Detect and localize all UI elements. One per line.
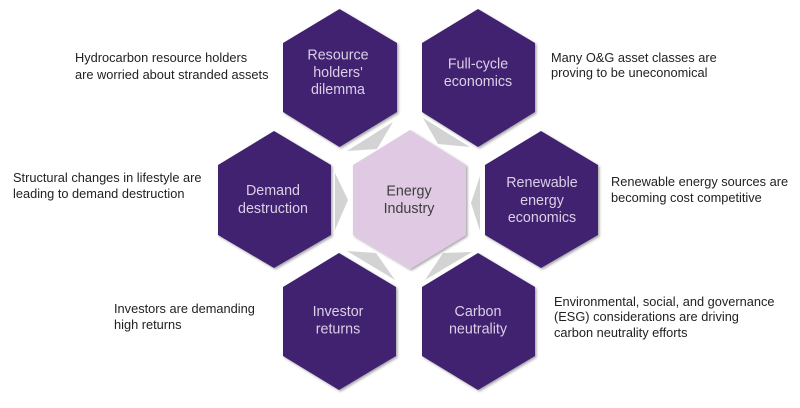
hexagon: carbon neutrality xyxy=(422,253,535,390)
hexagon: resource holders' dilemma: Resource xyxy=(307,48,369,64)
hexagon: energy industry center xyxy=(353,130,466,269)
text: investor description: Investors are demanding xyxy=(114,301,255,316)
arrow: resource holders to center xyxy=(347,122,393,151)
text: carbon description: Environmental, social, and governance xyxy=(554,294,775,309)
hexagon: renewable energy economics: Renewable xyxy=(506,175,578,191)
hexagon: demand destruction xyxy=(218,131,331,268)
arrow: investor to center xyxy=(347,251,395,280)
text: renewable description xyxy=(611,174,788,205)
hexagon: resource holders' dilemma: holders' xyxy=(313,65,363,81)
hexagon: demand destruction: destruction xyxy=(238,201,308,217)
hexagon: resource holders' dilemma: dilemma xyxy=(311,82,365,98)
hexagon: renewable energy economics: economics xyxy=(508,210,576,226)
hexagon: renewable energy economics xyxy=(485,131,598,268)
hexagon: demand destruction: Demand xyxy=(246,183,300,199)
hexagon: investor returns xyxy=(283,253,396,390)
hexagon: carbon neutrality: neutrality xyxy=(449,322,508,338)
text: resource holders description: are worried about stranded assets xyxy=(75,67,268,82)
arrow: carbon to center xyxy=(425,252,472,280)
text: investor description: high returns xyxy=(114,317,182,332)
hexagon: renewable energy economics: energy xyxy=(520,193,565,209)
text: demand description: leading to demand destruction xyxy=(13,186,184,201)
text: carbon description xyxy=(554,294,775,340)
text: renewable description: Renewable energy sources are xyxy=(611,174,788,189)
text: resource holders description xyxy=(75,50,268,82)
text: resource holders description: Hydrocarbon resource holders xyxy=(75,50,247,65)
hexagon: investor returns: Investor xyxy=(313,304,364,320)
arrow: full-cycle to center xyxy=(423,118,470,147)
hexagon: full-cycle economics: Full-cycle xyxy=(448,56,508,72)
hexagon: carbon neutrality: Carbon xyxy=(455,304,501,320)
text: carbon description: carbon neutrality efforts xyxy=(554,325,688,340)
text: carbon description: (ESG) considerations are driving xyxy=(554,309,739,324)
text: demand description xyxy=(13,170,202,201)
arrow: renewable to center xyxy=(471,176,480,231)
hexagon: resource holders' dilemma xyxy=(283,9,397,147)
hexagon: energy industry center: Energy xyxy=(386,184,432,200)
hexagon: investor returns: returns xyxy=(316,322,360,338)
text: investor description xyxy=(114,301,255,332)
hexagon: full-cycle economics xyxy=(422,9,535,147)
arrow: demand to center xyxy=(335,173,348,230)
text: full-cycle description xyxy=(551,50,717,80)
hexagon: energy industry center: Industry xyxy=(384,201,435,217)
text: full-cycle description: proving to be uneconomical xyxy=(551,65,708,80)
text: renewable description: becoming cost competitive xyxy=(611,190,762,205)
text: full-cycle description: Many O&G asset classes are xyxy=(551,50,717,65)
hexagon: full-cycle economics: economics xyxy=(444,74,512,90)
text: demand description: Structural changes in lifestyle are xyxy=(13,170,202,185)
